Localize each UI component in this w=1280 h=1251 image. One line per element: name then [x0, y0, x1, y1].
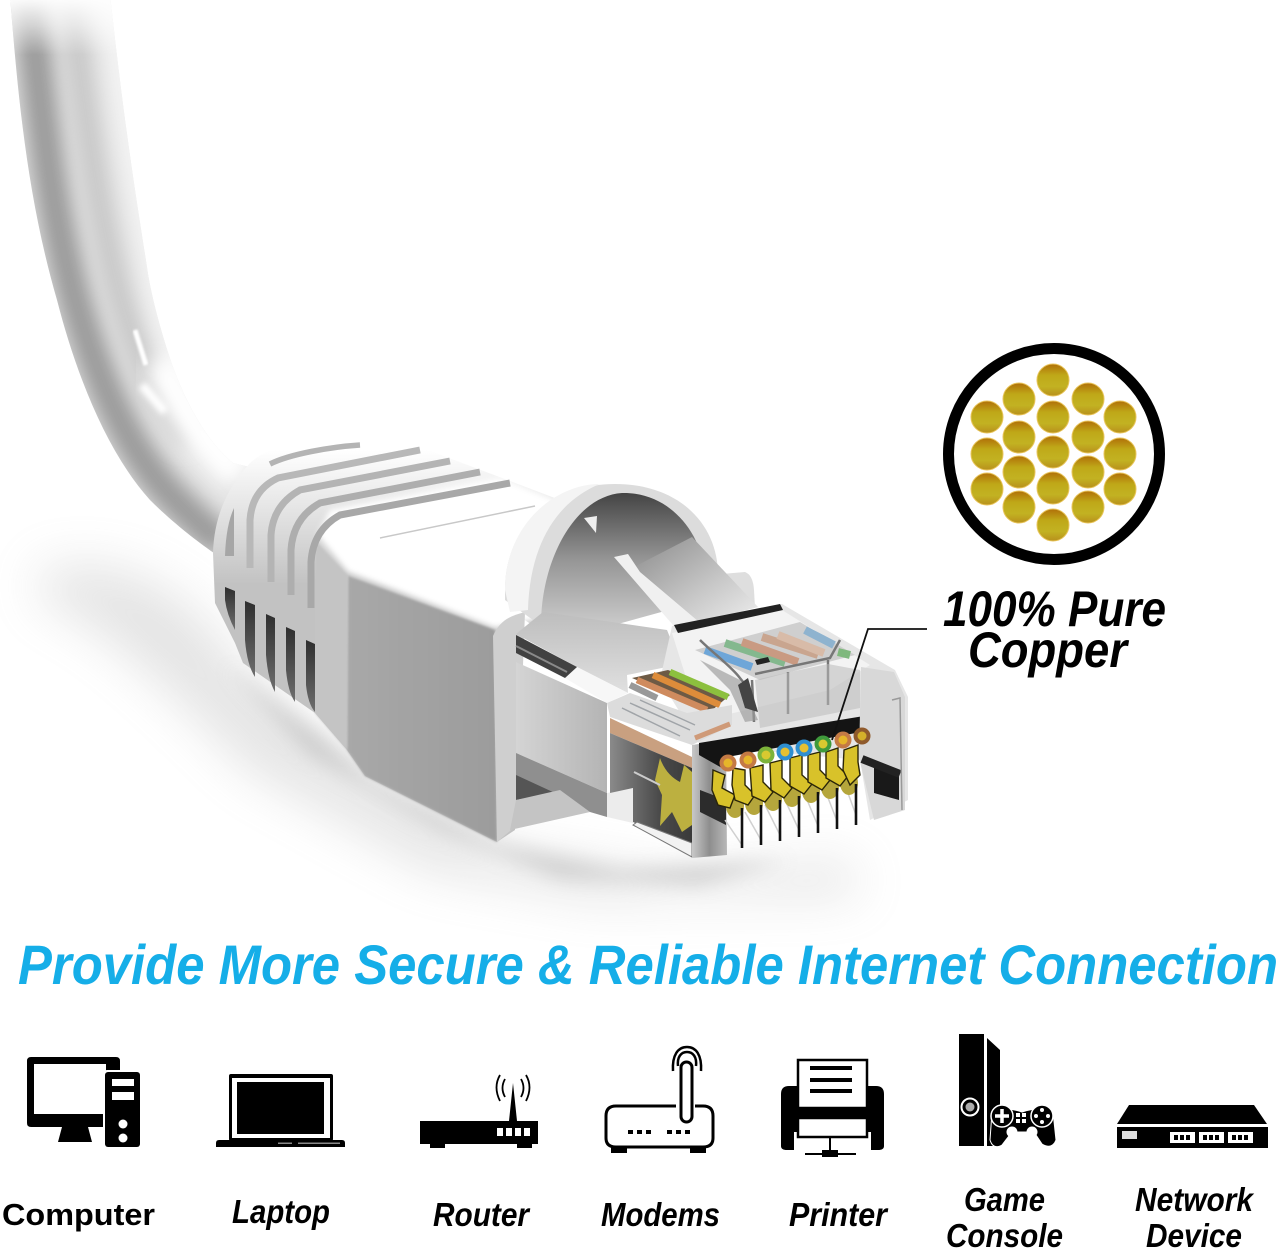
cable sleeve strip [610, 718, 692, 768]
pins backing lines [725, 785, 856, 845]
boot silhouette [213, 442, 560, 842]
boot hood [505, 484, 758, 640]
lower conductors [632, 670, 730, 712]
icon: network device [1117, 1105, 1268, 1148]
gold contact blade [655, 758, 692, 832]
front black bar [699, 716, 872, 768]
latch strip [614, 554, 705, 632]
gold contacts [712, 745, 860, 808]
RJ45 plug [510, 604, 908, 858]
label: Router: Router [433, 1196, 531, 1233]
lower clear frame [633, 822, 692, 857]
label: Network Device [1135, 1181, 1254, 1251]
boot seam [380, 506, 535, 538]
rounded tab [710, 572, 755, 608]
icon: computer [27, 1057, 142, 1149]
callout text: 100% Pure Copper: 100% Pure [943, 581, 1166, 637]
latch band [632, 537, 758, 623]
cable [10, 2, 247, 552]
callout text: 100% Pure Copper [943, 581, 1166, 678]
icon: laptop [216, 1074, 345, 1147]
label: Game Console [946, 1181, 1063, 1251]
plug top surface [516, 612, 687, 693]
RJ45 boot [213, 442, 560, 842]
gold cylinders [726, 771, 858, 818]
copper strand cross-section [948, 348, 1160, 560]
boot ribs [225, 445, 510, 608]
contact housing clear [660, 604, 908, 820]
wire ends [720, 728, 870, 772]
plug left block [516, 662, 607, 793]
label: Computer: Computer [2, 1197, 155, 1232]
plug dark strip [516, 635, 577, 678]
label: Game Console: Game [964, 1181, 1045, 1218]
callout text: 100% Pure Copper: Copper [968, 622, 1129, 678]
plug middle ledge [607, 693, 732, 745]
coloured conductors upper [705, 630, 850, 667]
white wedge [565, 667, 628, 703]
label: Printer: Printer [789, 1196, 889, 1233]
ground shadow [40, 565, 860, 900]
icon: printer [781, 1060, 884, 1157]
boot slots [225, 587, 315, 712]
lower dark chamber [610, 733, 692, 848]
callout leader line [832, 629, 927, 740]
metal pins [742, 784, 856, 848]
right housing [859, 667, 905, 820]
contact black rail [674, 604, 783, 633]
plug lower left [516, 753, 607, 817]
boot side face [347, 576, 497, 842]
label: Modems: Modems [601, 1196, 720, 1233]
icon: router [420, 1075, 538, 1148]
boot top surface [318, 478, 555, 628]
metal reflections [700, 640, 840, 722]
label: Network Device: Network [1135, 1181, 1254, 1218]
label: Laptop: Laptop [232, 1193, 330, 1230]
icon: modem [606, 1047, 713, 1153]
icon: game console [959, 1034, 1056, 1147]
